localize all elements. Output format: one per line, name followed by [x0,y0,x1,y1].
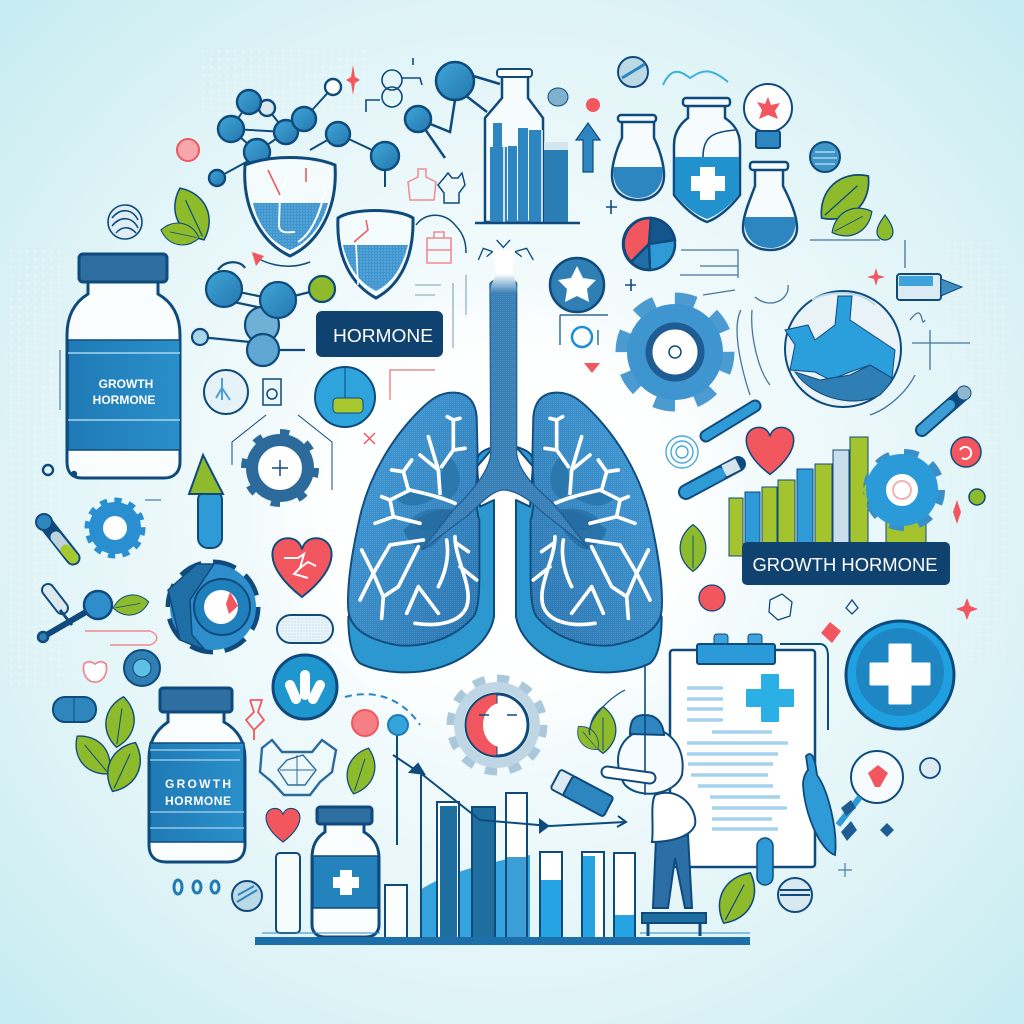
leaf right top [810,163,880,243]
dot ring [124,650,160,686]
chemical hexagons [366,58,422,112]
small red icon [83,662,107,682]
icon: red outline box [427,232,451,263]
leaves lower left [67,695,149,798]
sparkles and ticks [60,350,852,877]
person figure [589,665,706,936]
dash lines near badge [415,275,466,348]
red corner lines [390,370,435,400]
leaf mid bottom [341,744,381,798]
hormone badge [316,311,443,357]
growth hormone badge [742,542,950,585]
bottle label text: HORMONE [93,393,155,407]
connector arc [253,215,466,266]
red sparkle right [867,268,885,286]
teal squiggle [663,71,728,85]
dashed arc [345,694,420,725]
blue pill circle [810,142,840,172]
bottle three [312,807,379,937]
slanted pill top [706,406,755,436]
bottle two label text: HORMONE [165,794,231,808]
chart baseline [255,933,750,945]
leaf near person [572,707,616,755]
trachea [422,240,588,550]
big dark gear [168,562,258,652]
soccer ball sphere [785,291,901,407]
leaf bottom right [710,865,764,931]
bar chart bottom [385,793,635,938]
pill blue [53,697,96,722]
main trachea and lungs [348,240,662,672]
heart lower [266,808,300,842]
right lung [516,393,662,672]
ball bottom right [778,878,812,912]
green drop [877,215,893,240]
large gear right [623,300,727,404]
growth hormone badge: GROWTH HORMONE [752,555,938,575]
vial right [897,274,962,300]
gear on chart [869,455,939,525]
small outlines under badge [769,594,858,620]
blue badge with bone [273,655,337,719]
label stripes [68,353,180,420]
sparkle marks [606,200,636,291]
capsule right [686,464,738,492]
bottle two label text: GROWTH [165,777,231,791]
icon: blue circle with green [315,367,375,427]
red diamonds [953,500,978,620]
turtle hex icon [260,740,336,795]
gear center lower [453,681,541,769]
pen right [803,754,836,855]
pink diagram [246,700,264,740]
leaf under chart [680,525,706,571]
slanted pill inner [706,406,755,436]
dashed red line [85,631,157,645]
small blue gear [89,502,141,554]
magnifier circle [838,751,903,825]
red cross [364,433,375,444]
red heart [746,427,794,474]
green bar chart [729,437,926,556]
hormone badge: HORMONE [333,326,433,346]
trend line [388,715,626,938]
round flask [612,115,664,200]
star badge [550,258,604,312]
capsule outline [277,615,333,643]
clipboard [670,634,828,867]
top-left molecule [209,79,399,187]
shield flask with cross [674,98,740,222]
small red heart marker [584,363,600,373]
icon: light circle [204,370,248,414]
flask lower right [743,162,797,250]
red and dark icons [408,169,465,203]
circuit lines right [680,240,970,415]
white glow behind lungs [250,280,760,760]
halftone patch left [5,250,60,690]
big bottle [67,254,180,478]
red ring icon [951,437,981,467]
dots near flask [548,88,600,112]
leaf top left [159,182,218,249]
ring circle [920,758,940,778]
shield two [338,210,413,298]
upper molecule [405,62,500,158]
red tag [821,622,841,643]
arrow up [576,123,600,172]
ring with bracket [560,315,608,347]
bottle two [149,688,245,862]
halftone patch top [200,45,370,115]
green blue arrow [189,455,223,548]
red star marker [346,65,360,95]
big plus badge [846,621,954,729]
light bulb with red star [744,84,792,148]
icon: square note [263,379,281,405]
pink ball [352,710,378,736]
tube outline [276,853,300,933]
vial tilted [550,769,614,817]
tube far right [922,386,971,430]
ball bottom left [232,881,262,911]
shield one [245,158,335,256]
small left dots [43,465,76,476]
molecule two [192,262,335,366]
icon: fingerprint ball [108,205,142,239]
pale fill under chart [420,855,530,938]
green dot [969,489,985,505]
dumbbell pills [38,590,112,642]
icon: pink dot [177,139,199,161]
small green leaf [112,592,150,618]
pill left [36,514,73,558]
red marker [252,252,264,266]
bottle label text: GROWTH [99,377,153,391]
dark squares [841,800,894,841]
capsule vertical [757,838,773,885]
pill ball [618,57,648,87]
broken heart [272,538,332,597]
red ball [699,585,725,611]
left lung [348,393,494,672]
fingerprint dots [666,436,698,468]
bottle body [67,282,180,478]
icon: gear left [232,415,332,501]
pie chart [623,218,675,270]
halftone patch right [940,240,1010,660]
top flask with bars [475,69,580,223]
bottle label [68,340,180,450]
bottle cap [79,254,167,282]
dots row [174,880,219,894]
